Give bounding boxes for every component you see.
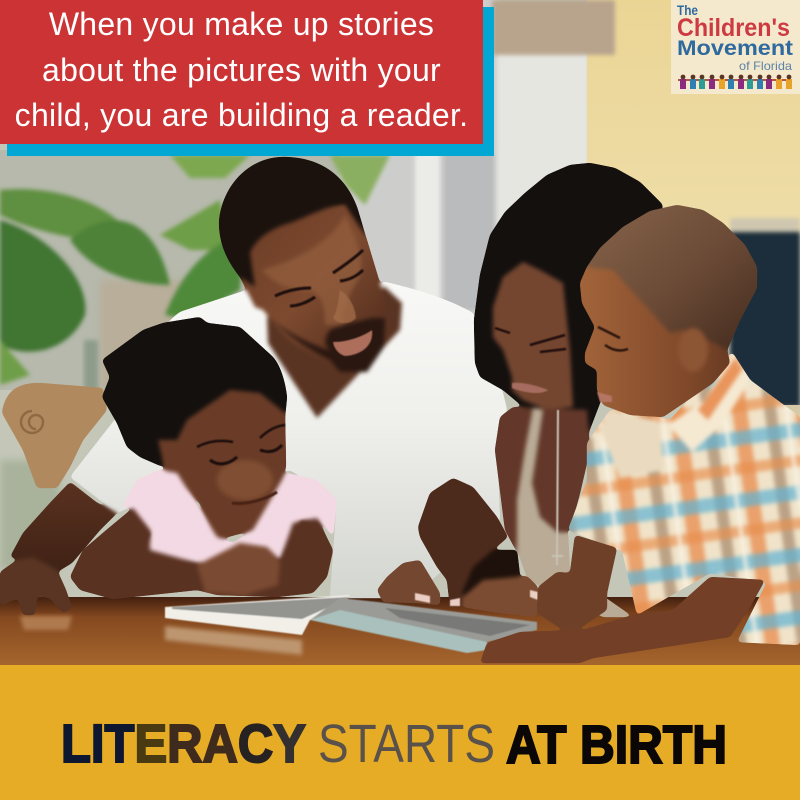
hands on the book [377,478,538,617]
mother's top [517,408,633,617]
father's face details [275,250,372,356]
boy's lower arm and hand [480,577,765,663]
table [0,597,800,665]
logo text: children's: Children's [677,14,790,42]
plant leaves [0,155,390,385]
girl's cheek highlight [217,460,273,500]
mother's left hand [377,560,440,605]
boy's face details [597,327,628,402]
mother's face details [495,328,566,565]
back cover [310,608,487,653]
girl's arms [70,508,333,599]
girl's shirt [122,470,337,562]
father's neck [267,287,402,418]
logo [671,0,800,94]
headline line 1: When you make up stories [49,6,434,42]
boy's ear [678,328,708,372]
shadow under hands [463,550,520,597]
father's arm [10,482,117,572]
father's beard [263,310,385,372]
girl [70,317,337,599]
boy [480,205,765,663]
father's hand on table [0,557,72,615]
headline line 2: about the pictures with your [42,52,441,88]
girl's face and neck [158,390,286,540]
wooden chair [2,383,107,488]
mother's hair [474,163,663,455]
logo text: the: The [677,2,698,18]
open picture book [165,595,537,653]
boy's plaid shirt [568,352,800,645]
father's forehead highlight [262,215,361,325]
girl's hair [102,317,287,467]
icon: row of paper-chain children [678,75,792,89]
boy's head [580,205,757,417]
mother's right hand [463,576,538,617]
father's hair [219,157,366,287]
panel: red headline [0,0,483,144]
headline line 3: child, you are building a reader. [15,97,468,133]
boy's upper arm and hand [537,535,617,628]
boy's collar stripe [698,358,742,420]
panel: headline shadow [7,7,494,156]
father's shirt [70,282,507,598]
fingernails [415,590,538,606]
boy's hair [587,205,757,350]
mother's face [493,262,573,410]
yellow band [0,665,800,800]
girl's hand [197,543,280,595]
father's head [240,205,385,370]
left pages [165,595,350,635]
boy's collar [668,352,750,452]
tagline [61,720,727,770]
father [0,157,507,615]
father's pointing hand [418,478,508,607]
girl's face details [197,425,285,503]
boy's left collar [600,410,664,478]
logo text: movement: Movement [677,37,793,60]
logo text: of florida: of Florida [739,59,792,73]
mother [474,163,663,617]
mother's shoulder and chest [495,407,590,552]
right pages [310,598,537,642]
